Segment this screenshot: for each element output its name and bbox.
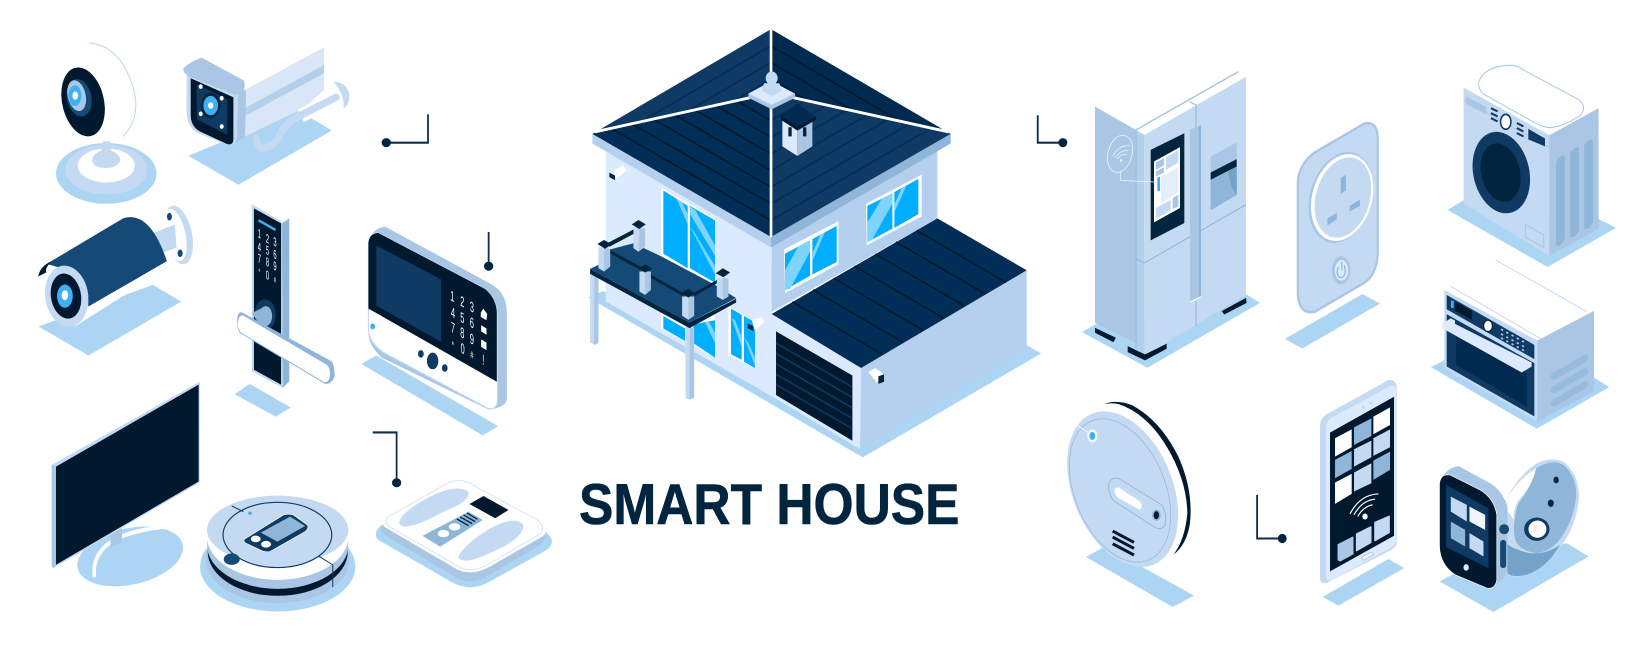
icon: smart door lock with keypad: 9 [273, 259, 277, 275]
icon: wall control panel with screen and keypad: 8 [460, 324, 465, 343]
chimney [781, 104, 816, 156]
connector line: scale [373, 432, 401, 487]
connector line: tablet [1257, 495, 1287, 543]
house walls [592, 134, 951, 397]
left devices group [38, 43, 552, 611]
small camera on upper wall [609, 166, 626, 180]
icon: smart door lock with keypad [235, 204, 335, 417]
main hip roof [592, 29, 951, 237]
icon: built-in oven [1431, 260, 1609, 429]
large glass balcony doors [661, 187, 715, 358]
icon: smart wall socket [1285, 123, 1385, 348]
icon: wall control panel with screen and keypad: 7 [451, 319, 455, 337]
icon: smart door lock with keypad: # [274, 276, 276, 286]
icon: wall security camera [183, 47, 349, 185]
icon: wall control panel with screen and keypad: * [452, 338, 454, 352]
icon: washing machine [1448, 65, 1616, 267]
icon: wifi webcam on round stand [54, 43, 157, 204]
house ground shadow [588, 291, 1041, 457]
garage wall and door [772, 270, 1027, 449]
icon: smart door lock with keypad: 1 [258, 227, 261, 243]
small camera on garage [868, 368, 884, 384]
central house group [588, 29, 1041, 457]
icon: wall control panel with screen and keypad: 4 [451, 304, 455, 323]
icon: smart watch with band [1439, 460, 1588, 612]
icon: smart door lock with keypad: 3 [273, 235, 277, 251]
icon: smart door lock with keypad: 0 [266, 269, 269, 284]
icon: smart refrigerator [1082, 72, 1260, 368]
icon: bullet camera [38, 202, 198, 356]
icon: wall control panel with screen and keypad: 5 [460, 309, 465, 328]
icon: wall control panel with screen and keypad: 1 [450, 288, 454, 306]
connector line: control panel [484, 232, 493, 271]
connector line: cameras [382, 114, 428, 147]
upper windows on right wall [784, 175, 922, 293]
connector line: fridge [1038, 115, 1067, 147]
icon: wall control panel with screen and keypad: 3 [470, 299, 474, 317]
icon: smart door lock with keypad: 2 [266, 232, 269, 248]
icon: tablet with smart home app [1320, 380, 1404, 606]
small camera by window [748, 317, 764, 331]
icon: smart door lock with keypad: 7 [258, 252, 261, 268]
icon: wall control panel with screen and keypad: # [470, 348, 473, 362]
icon: flat screen TV on stand [52, 382, 200, 595]
icon: smart door lock with keypad: 5 [266, 244, 269, 259]
icon: smart door lock with keypad: 4 [258, 240, 261, 256]
balcony [590, 220, 736, 400]
icon: smart bathroom scale [376, 478, 552, 587]
icon: wall control panel with screen and keypad: 9 [470, 331, 474, 349]
small window by door [728, 306, 755, 368]
icon: wall control panel with screen and keypad: 0 [461, 340, 465, 358]
icon: wall control panel with screen and keypad: 6 [470, 314, 474, 333]
garage roof [772, 218, 1027, 368]
icon: wall control panel with screen and keypad: ! [482, 352, 484, 369]
icon: wall control panel with screen and keypad: 2 [460, 293, 464, 311]
icon: smart door lock with keypad: 6 [273, 248, 277, 263]
icon: robot vacuum cleaner [200, 493, 355, 611]
icon: smart door lock with keypad: * [259, 268, 260, 278]
roof finial cap [748, 72, 795, 109]
icon: smart door lock with keypad: 8 [266, 255, 269, 271]
right devices group [1038, 65, 1616, 612]
icon: wall control panel with screen and keypad [361, 227, 507, 435]
icon: smoke detector [1046, 395, 1200, 607]
title: SMART HOUSE [579, 473, 959, 537]
